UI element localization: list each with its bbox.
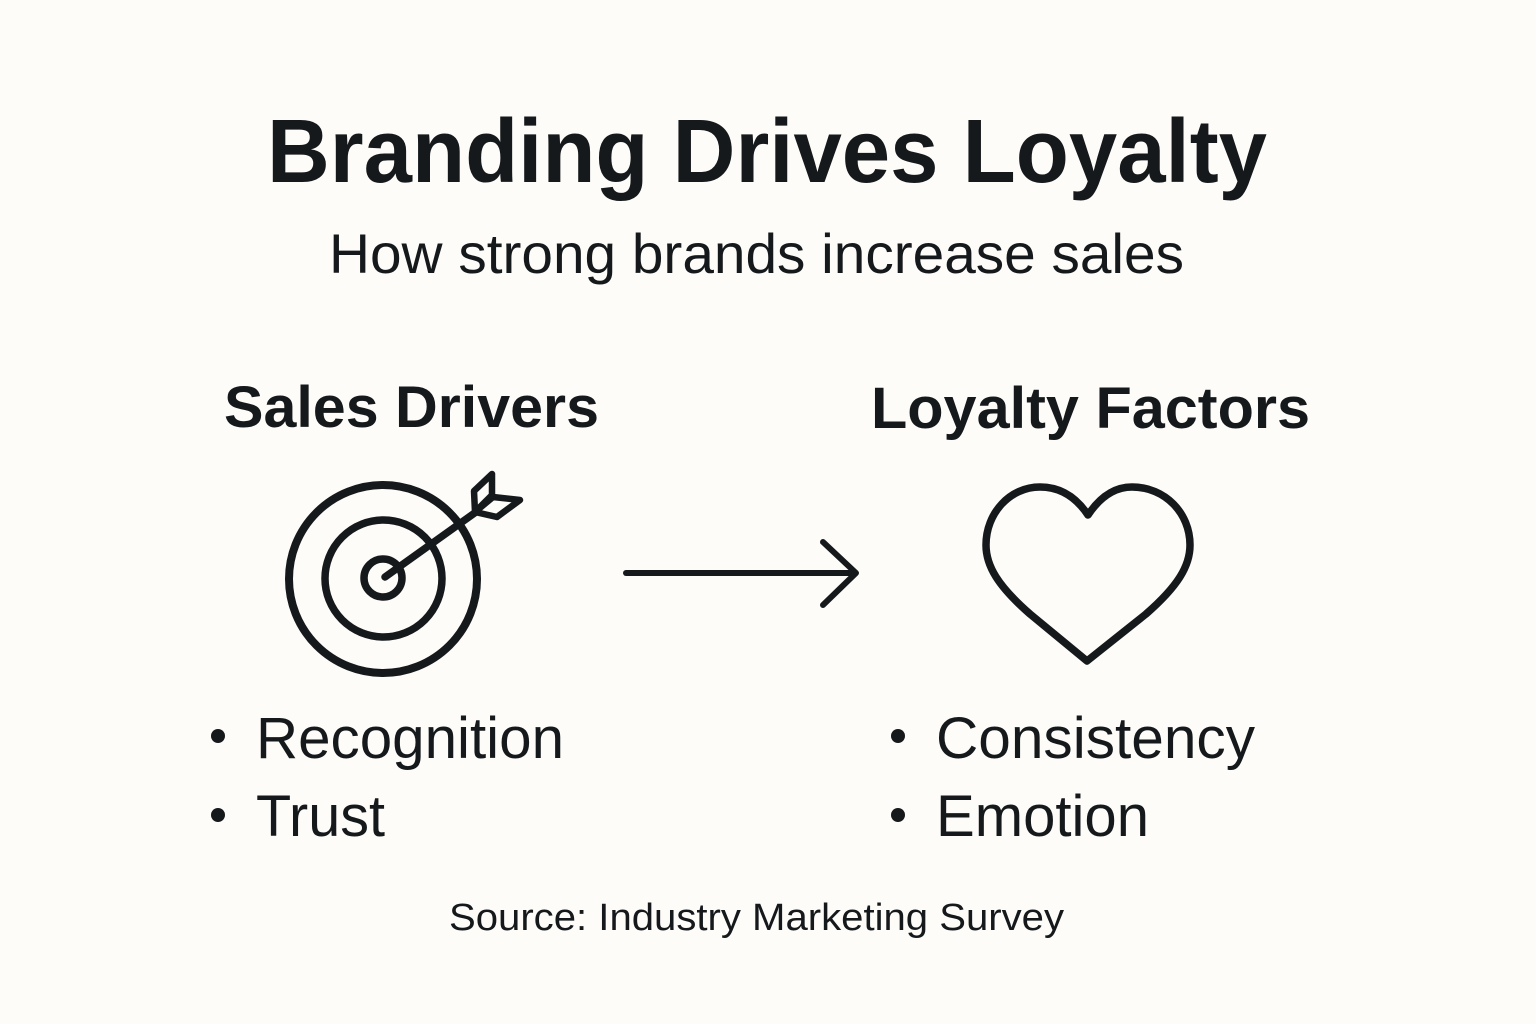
subtitle: How strong brands increase sales bbox=[329, 222, 1184, 285]
panel: sales drivers bbox=[211, 375, 599, 849]
list: loyalty factors bbox=[891, 706, 1255, 849]
icon: target with arrow bbox=[289, 474, 520, 673]
list: sales drivers: Recognition bbox=[256, 706, 564, 771]
icon: heart bbox=[986, 487, 1190, 661]
heading: loyalty factors: Loyalty Factors bbox=[871, 376, 1310, 441]
source note: Source: Industry Marketing Survey bbox=[449, 897, 1064, 939]
title: Branding Drives Loyalty bbox=[267, 102, 1267, 202]
list: sales drivers bbox=[211, 706, 564, 849]
list: loyalty factors: Consistency bbox=[936, 706, 1255, 771]
panel: loyalty factors bbox=[871, 376, 1310, 849]
list: loyalty factors: Emotion bbox=[936, 784, 1149, 849]
heading: sales drivers: Sales Drivers bbox=[224, 375, 599, 440]
list: sales drivers: Trust bbox=[256, 784, 385, 849]
arrow: drivers to loyalty bbox=[626, 542, 856, 605]
